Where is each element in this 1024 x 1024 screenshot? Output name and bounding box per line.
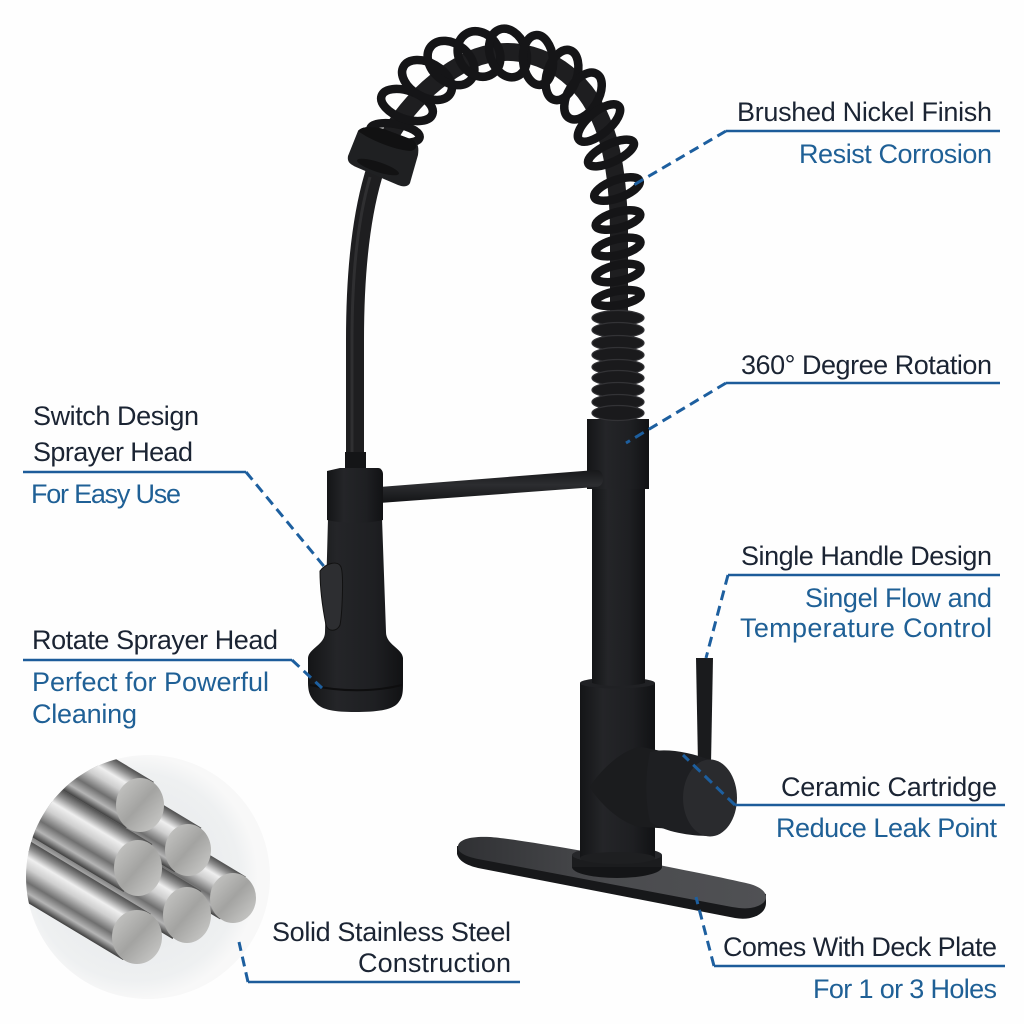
heading: Rotate Sprayer Head [32, 625, 278, 655]
subtext: Reduce Leak Point [776, 813, 997, 843]
sprayer [308, 468, 403, 712]
callout: single handle design [706, 541, 1000, 658]
subtext line two: Temperature Control [740, 613, 992, 643]
subtext line two: Cleaning [32, 699, 137, 729]
heading line two: Sprayer Head [33, 437, 193, 467]
heading: Brushed Nickel Finish [737, 97, 992, 127]
heading: Ceramic Cartridge [781, 772, 997, 802]
heading: 360° Degree Rotation [741, 350, 992, 380]
heading: Solid Stainless Steel [272, 917, 511, 947]
base cylinder [580, 678, 655, 864]
deck plate [457, 837, 766, 919]
subtext: For Easy Use [31, 479, 181, 509]
callout: rotate sprayer head [23, 625, 322, 729]
subtext: Perfect for Powerful [32, 667, 269, 697]
leader line [239, 942, 248, 982]
stainless steel rods [26, 759, 256, 964]
leader line [696, 897, 714, 966]
faucet [308, 23, 766, 919]
sprayer body [308, 518, 403, 712]
handle cylinder [646, 750, 710, 836]
leader line [706, 575, 728, 658]
heading line two: Construction [358, 948, 511, 978]
leader line [292, 660, 322, 688]
horizontal support rod [380, 470, 603, 503]
sprayer switch [320, 563, 343, 630]
callout: ceramic cartridge [683, 755, 1005, 843]
callout: brushed nickel finish [632, 97, 1000, 186]
sprayer top cup [327, 468, 383, 523]
lower hose collar [345, 452, 366, 470]
leader line [632, 131, 726, 186]
leader line [626, 383, 726, 443]
subtext: Resist Corrosion [799, 139, 992, 169]
upper column [592, 480, 645, 686]
subtext: For 1 or 3 Holes [813, 974, 997, 1004]
leader line [246, 472, 327, 570]
collar at spring base [587, 419, 649, 489]
hose guide head [348, 127, 418, 186]
callout: 360 degree rotation [626, 350, 1000, 443]
callout: solid stainless steel [239, 917, 520, 982]
heading: Single Handle Design [741, 541, 992, 571]
leader line [683, 755, 735, 805]
callout: switch design sprayer head [23, 401, 327, 570]
handle cone [590, 747, 690, 830]
photo backdrop [26, 755, 270, 999]
handle lever [696, 658, 713, 764]
callout: deck plate [696, 897, 1005, 1004]
handle disc [683, 760, 737, 836]
heading: Comes With Deck Plate [723, 932, 997, 962]
foot ring [572, 847, 662, 878]
spray head ring [310, 685, 402, 690]
spring coil [369, 23, 644, 420]
steel rods photo [26, 759, 256, 996]
heading: Switch Design [33, 401, 199, 431]
subtext: Singel Flow and [805, 583, 992, 613]
hose arch [352, 52, 619, 462]
side handle [590, 658, 737, 836]
